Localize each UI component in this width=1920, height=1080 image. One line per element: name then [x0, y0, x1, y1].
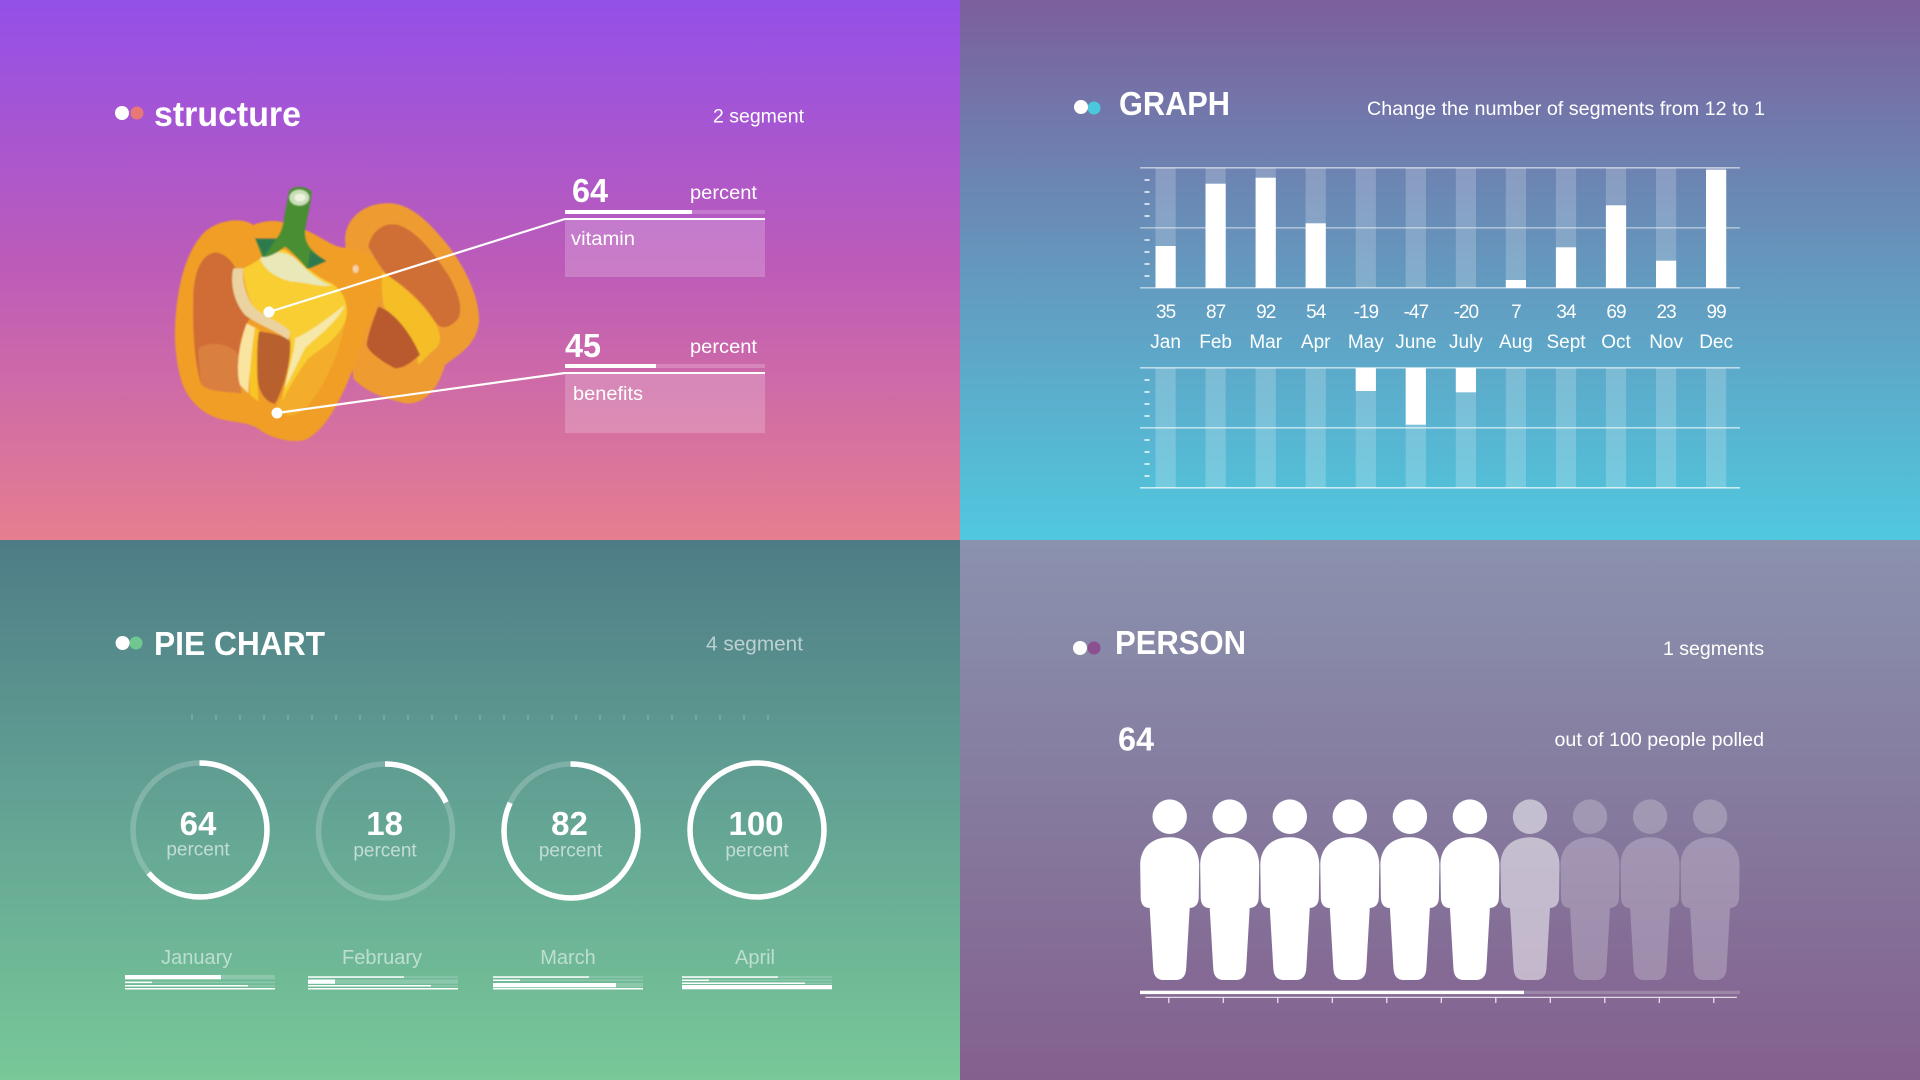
donut: January 64 percent: percent	[166, 840, 230, 860]
callout: benefits: benefits	[573, 384, 643, 405]
callout: vitamin: 64	[572, 172, 609, 209]
icon: pie chart logo dots	[116, 636, 142, 650]
chart month labels: Mar	[1249, 332, 1283, 353]
heading: GRAPH: GRAPH	[1119, 85, 1230, 122]
chart values: 87	[1206, 302, 1226, 323]
chart month labels: July	[1449, 332, 1483, 353]
heading: PERSON: PERSON	[1115, 624, 1246, 661]
donut: March 82 percent: percent	[539, 840, 603, 862]
mini bars: February	[308, 976, 458, 990]
segment note: Change the number of segments from 12 to 1	[1367, 98, 1765, 120]
mini bars: January	[125, 975, 275, 990]
chart month labels	[1150, 332, 1733, 353]
donut: January 64 percent: 64	[180, 805, 217, 842]
chart values: -20	[1454, 302, 1479, 323]
icon: person logo dots	[1073, 641, 1100, 655]
callout line: benefits	[272, 373, 565, 418]
bar chart: negative values	[1140, 367, 1740, 489]
donut: February 18 percent: percent	[353, 840, 417, 862]
ruler ticks	[192, 714, 768, 720]
heading: structure: structure	[154, 95, 301, 134]
donut: February 18 percent	[318, 764, 452, 898]
panel: graph	[960, 0, 1920, 540]
pictogram: ten people, 64 highlighted	[1140, 799, 1740, 980]
callout: benefits	[565, 327, 765, 433]
bar chart: positive values	[1140, 167, 1740, 289]
callout: vitamin	[565, 172, 765, 277]
chart month labels: Jan	[1150, 332, 1181, 353]
callout: benefits: 45	[565, 327, 601, 364]
segment label: 2 segment	[713, 106, 805, 128]
chart month labels: Sept	[1546, 332, 1586, 353]
donut: April 100 percent	[690, 763, 824, 897]
segment label: 1 segments	[1663, 638, 1764, 660]
chart values: 23	[1657, 302, 1676, 323]
chart month labels: Nov	[1649, 332, 1683, 353]
icon: structure logo dots	[115, 106, 144, 120]
chart month labels: Apr	[1301, 332, 1331, 353]
chart month labels: Feb	[1199, 332, 1232, 353]
mini bars: March	[493, 976, 643, 990]
panel: person	[960, 540, 1920, 1080]
chart values: 7	[1511, 302, 1521, 323]
donut: March 82 percent: 82	[551, 805, 588, 842]
label: April: April	[735, 947, 775, 969]
label: February: February	[342, 947, 422, 969]
donut: March 82 percent	[504, 764, 638, 898]
panel: pie chart	[0, 540, 960, 1080]
chart values: 34	[1556, 302, 1577, 323]
callout line: vitamin	[264, 219, 565, 318]
label: January: January	[161, 947, 232, 969]
icon: graph logo dots	[1074, 100, 1100, 114]
chart values: 35	[1156, 302, 1176, 323]
chart values: -47	[1404, 302, 1428, 323]
donut: January 64 percent	[133, 763, 267, 897]
heading: PIE CHART: PIE CHART	[154, 625, 325, 662]
chart values	[1156, 302, 1726, 323]
donut: April 100 percent: 100	[728, 805, 784, 842]
illustration: halved yellow pepper	[175, 187, 479, 441]
chart values: 92	[1256, 302, 1276, 323]
donut: April 100 percent: percent	[725, 840, 789, 862]
callout: vitamin: vitamin	[571, 229, 635, 250]
chart month labels: June	[1395, 332, 1436, 353]
donut: February 18 percent: 18	[366, 805, 403, 842]
chart values: -19	[1354, 302, 1378, 323]
big number: 64	[1118, 721, 1155, 758]
label: March: March	[540, 947, 596, 969]
chart month labels: Aug	[1499, 332, 1533, 353]
chart values: 69	[1606, 302, 1626, 323]
poll note: out of 100 people polled	[1554, 729, 1764, 751]
panel: structure	[0, 0, 960, 540]
progress bar	[1140, 991, 1740, 994]
chart month labels: May	[1348, 332, 1384, 353]
ruler	[1145, 997, 1737, 1003]
callout: vitamin: percent	[690, 183, 758, 204]
callout: benefits: percent	[690, 337, 758, 358]
chart values: 54	[1306, 302, 1327, 323]
chart month labels: Dec	[1699, 332, 1733, 353]
chart values: 99	[1707, 302, 1726, 323]
segment label: 4 segment	[706, 634, 803, 656]
mini bars: April	[682, 976, 832, 989]
chart month labels: Oct	[1601, 332, 1631, 353]
